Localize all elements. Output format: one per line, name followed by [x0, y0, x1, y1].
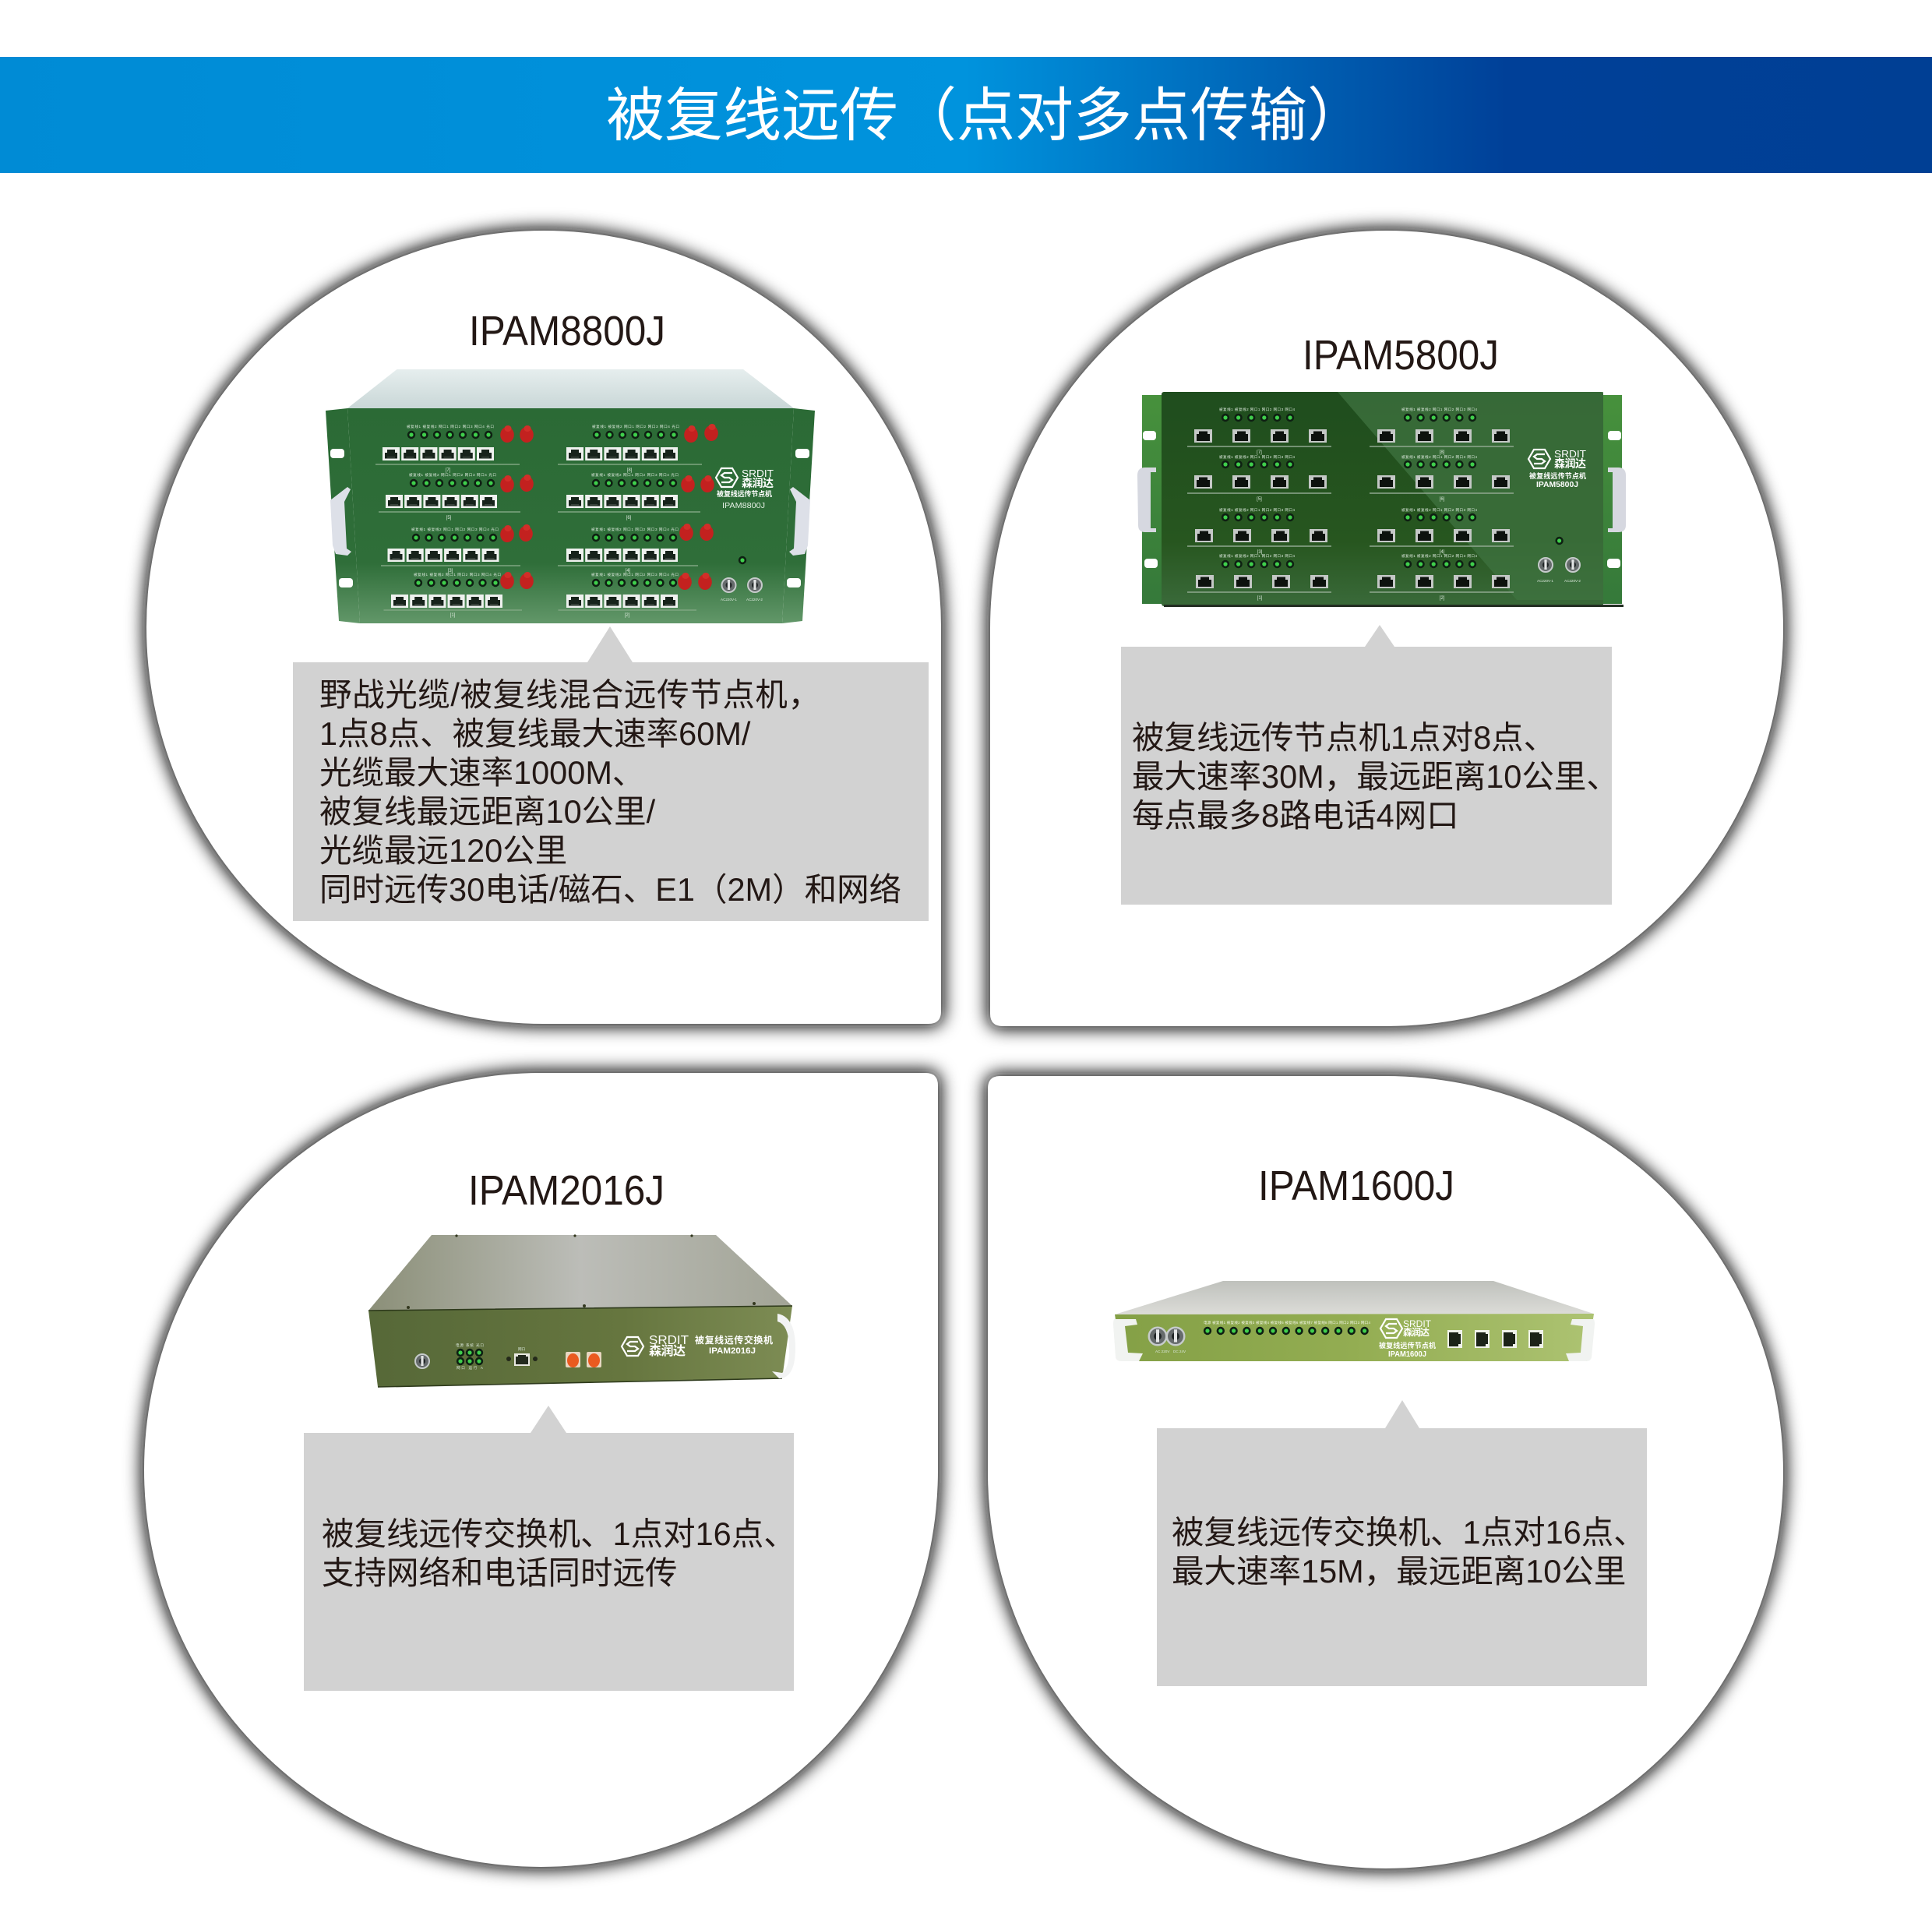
- heading: IPAM5800J: IPAM5800J: [1303, 332, 1499, 379]
- device image: IPAM5800J: 森润达: [1554, 457, 1586, 470]
- device image: IPAM5800J: 被复线1 被复线2 网口1 网口2 网口3 网口4: [1401, 507, 1477, 513]
- title banner: 被复线远传（点对多点传输）: [606, 83, 1366, 148]
- device image: IPAM5800J: 被复线1 被复线2 网口1 网口2 网口3 网口4: [1401, 407, 1477, 412]
- title banner: [0, 57, 1932, 173]
- device image: IPAM5800J: AC220V-1: [1537, 579, 1553, 583]
- device image: IPAM8800J: AC220V-2: [746, 598, 763, 602]
- description callout: 支持网络和电话同时远传: [322, 1554, 678, 1591]
- device image: IPAM1600J: AC 220V: [1155, 1350, 1170, 1353]
- device image: IPAM5800J: [8]: [1440, 450, 1445, 455]
- device image: IPAM8800J: [7]: [446, 468, 451, 473]
- device image: IPAM1600J: [1113, 1281, 1595, 1361]
- description callout: 被复线远传交换机、1点对16点、: [322, 1515, 796, 1552]
- description callout: 最大速率15M，最远距离10公里: [1172, 1553, 1626, 1590]
- device image: IPAM2016J: 被复线远传交换机: [695, 1334, 773, 1346]
- heading: IPAM1600J: IPAM1600J: [1258, 1163, 1454, 1209]
- device image: IPAM5800J: IPAM5800J: [1536, 481, 1578, 489]
- device image: IPAM8800J: [326, 369, 815, 623]
- device image: IPAM1600J: 森润达: [1403, 1326, 1430, 1338]
- description callout: 被复线远传节点机1点对8点、: [1132, 719, 1556, 756]
- device image: IPAM5800J: [5]: [1257, 497, 1262, 502]
- device image: IPAM5800J: [4]: [1440, 550, 1445, 555]
- device image: IPAM8800J: [2]: [625, 613, 630, 618]
- device image: IPAM8800J: 被复线1 被复线2 网口1 网口2 网口3 网口4 光口: [591, 572, 679, 577]
- device image: IPAM5800J: [1]: [1257, 596, 1263, 601]
- device image: IPAM5800J: [7]: [1257, 450, 1262, 455]
- device image: IPAM2016J: SRDIT: [649, 1334, 689, 1347]
- description callout: 光缆最大速率1000M、: [319, 754, 644, 791]
- device image: IPAM8800J: 被复线1 被复线2 网口1 网口2 网口3 网口4 光口: [411, 527, 499, 532]
- device image: IPAM8800J: 被复线1 被复线2 网口1 网口2 网口3 网口4 光口: [407, 424, 494, 429]
- device image: IPAM1600J: 电源 被复线1 被复线2 被复线3 被复线4 被复线5 被复线6 被复线7 被复线8 网口1 网口2 网口3 网口4: [1204, 1320, 1370, 1325]
- device image: IPAM8800J: [3]: [448, 569, 453, 573]
- description callout: [1157, 1400, 1647, 1686]
- device image: IPAM1600J: IPAM1600J: [1388, 1350, 1426, 1359]
- description callout: 被复线最远距离10公里/: [319, 793, 656, 830]
- device image: IPAM1600J: DC 24V: [1173, 1350, 1186, 1353]
- description callout: 同时远传30电话/磁石、E1（2M）和网络: [319, 871, 901, 908]
- device image: IPAM5800J: 被复线1 被复线2 网口1 网口2 网口3 网口4: [1219, 454, 1295, 460]
- device image: IPAM8800J: 被复线1 被复线2 网口1 网口2 网口3 网口4 光口: [591, 527, 679, 532]
- description callout: [1121, 625, 1619, 905]
- device image: IPAM2016J: 网口: [518, 1347, 526, 1352]
- device image: IPAM5800J: 被复线1 被复线2 网口1 网口2 网口3 网口4: [1219, 407, 1295, 412]
- device image: IPAM8800J: SRDIT: [742, 468, 774, 479]
- device image: IPAM2016J: 电源 系统 光口: [456, 1343, 484, 1348]
- device image: IPAM5800J: 被复线1 被复线2 网口1 网口2 网口3 网口4: [1219, 507, 1295, 513]
- device image: IPAM5800J: [2]: [1440, 596, 1445, 601]
- device image: IPAM8800J: [8]: [627, 468, 633, 473]
- device image: IPAM2016J: [368, 1234, 795, 1387]
- device image: IPAM8800J: 被复线1 被复线2 网口1 网口2 网口3 网口4 光口: [591, 472, 679, 478]
- device image: IPAM5800J: 被复线1 被复线2 网口1 网口2 网口3 网口4: [1401, 454, 1477, 460]
- device image: IPAM5800J: SRDIT: [1554, 448, 1586, 460]
- device image: IPAM5800J: 被复线1 被复线2 网口1 网口2 网口3 网口4: [1219, 553, 1295, 559]
- device image: IPAM5800J: [1137, 392, 1626, 607]
- device image: IPAM5800J: [3]: [1257, 550, 1263, 555]
- description callout: 野战光缆/被复线混合远传节点机，: [319, 676, 821, 713]
- device image: IPAM5800J: [6]: [1440, 497, 1445, 502]
- device image: IPAM8800J: [1]: [450, 613, 456, 618]
- description callout: 1点8点、被复线最大速率60M/: [319, 715, 751, 752]
- device image: IPAM1600J: 被复线远传节点机: [1379, 1341, 1436, 1350]
- panel: IPAM5800J: [990, 231, 1783, 1026]
- device image: IPAM8800J: 被复线1 被复线2 网口1 网口2 网口3 网口4 光口: [409, 472, 496, 478]
- device image: IPAM2016J: 网口 运行 A: [457, 1365, 484, 1371]
- device image: IPAM5800J: 被复线1 被复线2 网口1 网口2 网口3 网口4: [1401, 553, 1477, 559]
- device image: IPAM8800J: 被复线1 被复线2 网口1 网口2 网口3 网口4 光口: [414, 572, 501, 577]
- panel: IPAM2016J: [144, 1073, 938, 1867]
- description callout: 最大速率30M，最远距离10公里、: [1132, 758, 1619, 795]
- device image: IPAM5800J: AC220V-2: [1564, 579, 1581, 583]
- panel: IPAM1600J: [988, 1076, 1783, 1868]
- device image: IPAM8800J: [6]: [626, 516, 632, 520]
- panel: IPAM8800J: [146, 231, 941, 1024]
- description callout: 光缆最远120公里: [319, 832, 567, 869]
- description callout: 被复线远传交换机、1点对16点、: [1172, 1514, 1646, 1551]
- device image: IPAM8800J: 被复线1 被复线2 网口1 网口2 网口3 网口4 光口: [592, 424, 679, 429]
- description callout: 每点最多8路电话4网口: [1132, 797, 1459, 834]
- device image: IPAM8800J: 被复线远传节点机: [717, 489, 772, 498]
- device image: IPAM8800J: AC220V-1: [721, 598, 737, 602]
- device image: IPAM8800J: 森润达: [742, 477, 774, 489]
- device image: IPAM8800J: [5]: [446, 516, 452, 520]
- device image: IPAM2016J: IPAM2016J: [709, 1346, 756, 1356]
- heading: IPAM2016J: IPAM2016J: [468, 1167, 665, 1214]
- device image: IPAM2016J: 森润达: [649, 1343, 686, 1358]
- device image: IPAM5800J: 被复线远传节点机: [1529, 471, 1586, 480]
- device image: IPAM8800J: IPAM8800J: [722, 502, 765, 510]
- description callout: [304, 1406, 796, 1691]
- device image: IPAM8800J: [4]: [626, 569, 631, 573]
- device image: IPAM1600J: SRDIT: [1403, 1318, 1432, 1329]
- description callout: [293, 626, 929, 921]
- heading: IPAM8800J: IPAM8800J: [469, 308, 665, 355]
